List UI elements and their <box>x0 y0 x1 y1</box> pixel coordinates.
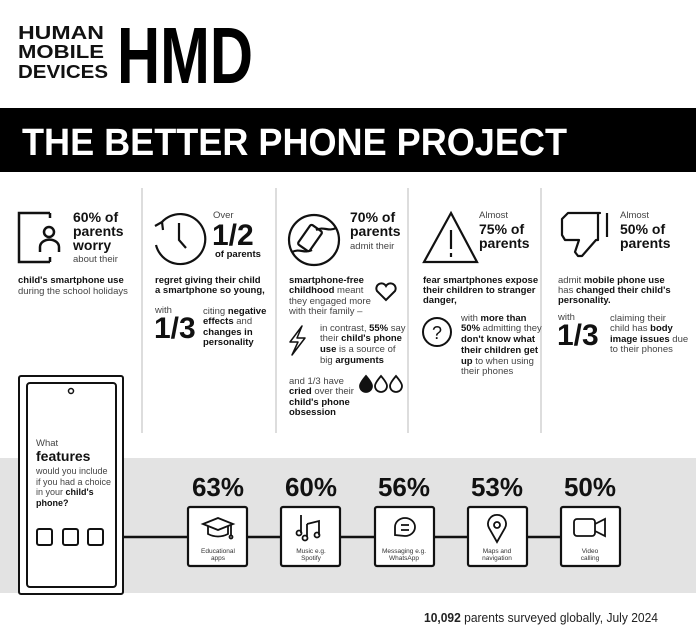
panel: 50% personality: image issues due <box>610 334 688 345</box>
panel: 75% stranger danger <box>423 210 542 377</box>
icon: video <box>574 519 605 536</box>
features chart: 60% <box>285 472 337 502</box>
features chart: apps <box>211 555 226 562</box>
connector line <box>124 536 590 538</box>
footer: 10,092 parents surveyed globally, July 2024 <box>424 611 658 625</box>
panel: 50% personality: 50% of <box>620 221 665 237</box>
panel: 70% smartphone-free: use is a source of <box>320 344 396 355</box>
panel: 50% personality: admit mobile phone use <box>558 275 665 286</box>
features chart: 63% <box>192 472 244 502</box>
features chart: 53% <box>471 472 523 502</box>
panel: 70% smartphone-free: parents <box>350 223 401 239</box>
features chart: Music e.g. <box>296 548 326 555</box>
panel: 50% personality: to their phones <box>610 344 673 355</box>
phone: features <box>36 448 91 464</box>
panel: 1/2 regret: effects and <box>203 316 252 327</box>
icon: question <box>423 318 451 346</box>
panel: 60% worry: 60% of <box>73 209 118 225</box>
phone: if you had a choice <box>36 477 111 487</box>
features chart: navigation <box>482 555 512 562</box>
panel: 1/2 regret: with <box>154 305 172 316</box>
panel: 60% worry <box>18 209 128 297</box>
panel: 1/2 regret: a smartphone so young, <box>155 285 265 296</box>
icon: tear drops <box>360 376 402 392</box>
panel: 75% stranger danger: don't know what <box>461 334 536 345</box>
icon: music <box>296 515 320 540</box>
panel: 60% worry: during the school holidays <box>18 286 128 297</box>
panel: 50% personality: parents <box>620 235 671 251</box>
phone: in your child's <box>36 487 94 497</box>
panel: 75% stranger danger: fear smartphones expose <box>423 275 538 286</box>
icon: heart <box>376 283 396 300</box>
logo: DEVICES <box>18 62 108 82</box>
panel: 70% smartphone-free: child's phone <box>289 397 350 408</box>
features chart: Educational <box>201 548 236 555</box>
features chart: Video <box>582 548 599 555</box>
phone: phone? <box>36 498 68 508</box>
gray band <box>0 458 696 593</box>
panel: 70% smartphone-free: childhood meant <box>289 285 364 296</box>
title band: THE BETTER PHONE PROJECT <box>22 122 567 164</box>
logo: HMD <box>117 11 253 100</box>
icon: message <box>395 518 415 536</box>
panel: 70% smartphone-free: with their family – <box>288 306 363 317</box>
features chart: Spotify <box>301 555 322 562</box>
panel: 1/2 regret: personality <box>203 337 254 348</box>
icon: lightning <box>290 326 305 355</box>
icon: thumbs down <box>562 213 607 256</box>
features chart: Messaging e.g. <box>382 548 426 555</box>
icon: person frame <box>19 213 59 262</box>
panel: 50% personality <box>557 210 688 355</box>
panel: 1/2 regret: citing negative <box>203 306 266 317</box>
phone <box>19 376 123 594</box>
panel: 1/2 regret: changes in <box>203 327 253 338</box>
panel: 1/2 regret: 1/2 <box>212 219 254 252</box>
panel: 70% smartphone-free: smartphone-free <box>289 275 364 286</box>
phone: would you include <box>35 466 108 476</box>
panel: 50% personality: child has body <box>610 323 674 334</box>
features chart: 56% <box>378 472 430 502</box>
panel: 70% smartphone-free: obsession <box>289 407 336 418</box>
features chart: Maps and <box>483 548 512 555</box>
panel: 70% smartphone-free: cried over their <box>289 386 354 397</box>
panel: 1/2 regret: Over <box>213 210 234 221</box>
icon: question: ? <box>432 323 442 343</box>
panel: 75% stranger danger: their phones <box>461 366 514 377</box>
icon: warning triangle <box>424 213 477 262</box>
panel: 75% stranger danger: Almost <box>479 210 508 221</box>
panel: 50% personality: 1/3 <box>557 319 599 352</box>
panel: 70% smartphone-free: admit their <box>350 241 394 252</box>
panel: 75% stranger danger: up to when using <box>461 356 534 367</box>
panel: 70% smartphone-free: big arguments <box>320 355 384 366</box>
icon: circle phone <box>289 215 339 265</box>
panel: 60% worry: parents <box>73 223 124 239</box>
features chart: calling <box>581 555 600 562</box>
panel: 50% personality: has changed their child's <box>558 285 671 296</box>
icon: clock <box>155 214 205 264</box>
panel: 1/2 regret: 1/3 <box>154 312 196 345</box>
panel: 75% stranger danger: their children to stranger <box>423 285 536 296</box>
logo: HUMAN <box>18 23 104 43</box>
panel: 70% smartphone-free: in contrast, 55% say <box>320 323 406 334</box>
panel: 70% smartphone-free: and 1/3 have <box>289 376 344 387</box>
panel: 75% stranger danger: 75% of <box>479 221 524 237</box>
phone: What <box>36 438 59 449</box>
panel: 60% worry: worry <box>72 237 111 253</box>
panel: 70% smartphone-free: their child's phone <box>320 333 402 344</box>
panel: 50% personality: claiming their <box>610 313 666 324</box>
icon: grad cap <box>203 518 233 538</box>
icon: map pin <box>488 515 506 542</box>
panel: 70% smartphone-free: they engaged more <box>289 296 371 307</box>
panel: 1/2 regret: of parents <box>215 249 261 260</box>
panel: 1/2 regret <box>154 210 266 348</box>
panel: 75% stranger danger: with more than <box>460 313 527 324</box>
panel: 60% worry: about their <box>73 254 118 265</box>
panel: 1/2 regret: regret giving their child <box>155 275 261 286</box>
panel: 50% personality: Almost <box>620 210 649 221</box>
panel: 60% worry: child's smartphone use <box>18 275 124 286</box>
panel: 50% personality: personality. <box>558 295 611 306</box>
panel: 75% stranger danger: parents <box>479 235 530 251</box>
panel: 70% smartphone-free <box>288 209 406 418</box>
features chart: WhatsApp <box>389 555 419 562</box>
panel: 75% stranger danger: their children get <box>461 345 539 356</box>
panel: 70% smartphone-free: 70% of <box>350 209 395 225</box>
features chart <box>188 472 620 566</box>
logo: MOBILE <box>18 42 104 62</box>
title band <box>0 108 696 172</box>
panel: 75% stranger danger: 50% admitting they <box>461 323 542 334</box>
features chart: 50% <box>564 472 616 502</box>
panel: 50% personality: with <box>557 312 575 323</box>
logo <box>18 11 253 100</box>
panel: 75% stranger danger: danger, <box>423 295 457 306</box>
